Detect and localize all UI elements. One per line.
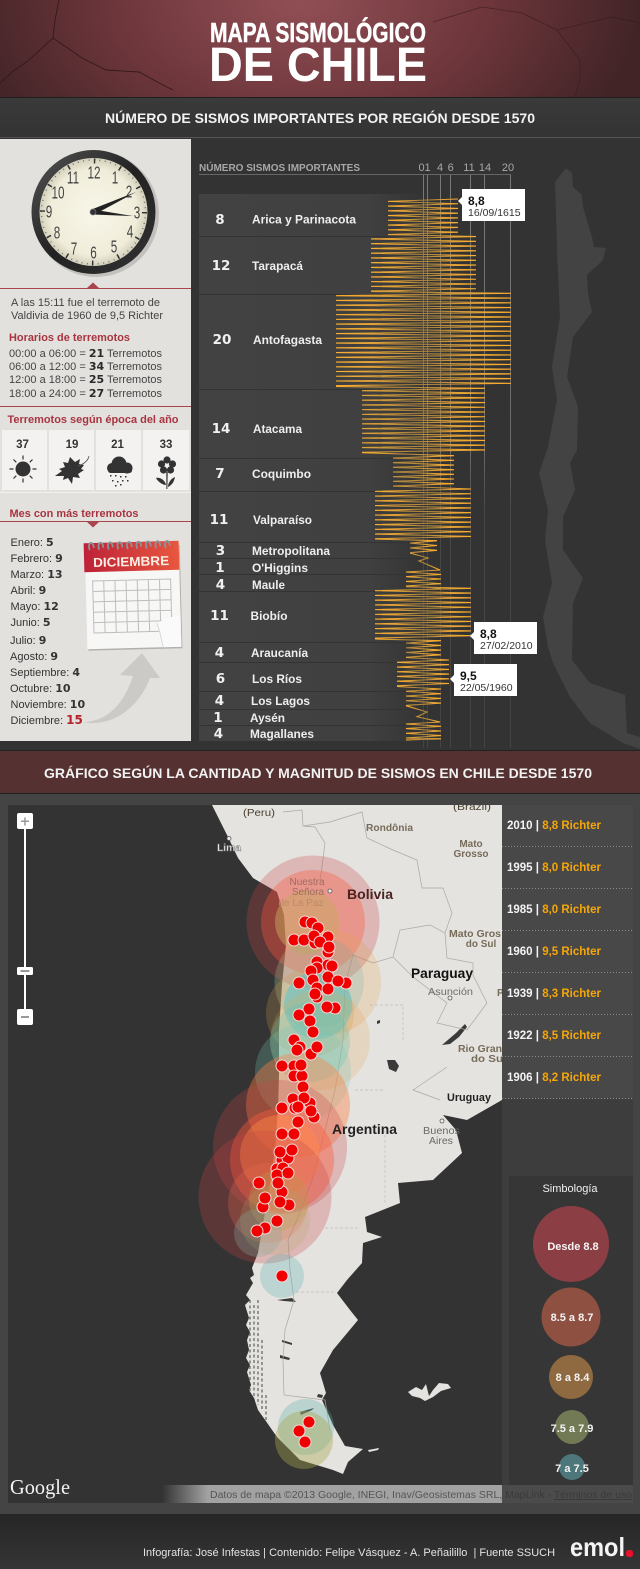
icon: flower [156, 456, 176, 489]
heading: época del año: Terremotos según época del año [8, 414, 179, 426]
map labels: Rio Gran [458, 1044, 502, 1055]
region labels: 4 [215, 645, 224, 661]
text: horarios de terremotos: 06:00 a 12:00 = 34 Terremotos [9, 360, 163, 373]
region labels: Antofagasta [253, 335, 323, 347]
legend: simbología: 8 a 8.4 [556, 1372, 590, 1384]
icon: clock: 3 [134, 203, 140, 223]
legend: simbología: 7.5 a 7.9 [551, 1423, 593, 1435]
map labels: Mato Gros [449, 929, 501, 940]
icon: leaf [55, 457, 84, 484]
region labels: Valparaíso [253, 515, 312, 527]
callout: 9,5 1960 [450, 664, 517, 696]
region labels: Maule [252, 580, 285, 592]
chart axis: 14 [479, 162, 491, 174]
region labels: 12 [212, 258, 230, 274]
icon: clock [32, 150, 159, 277]
list: months: Diciembre: 15 [10, 713, 83, 727]
land [212, 805, 502, 1474]
map labels: (Brazil) [453, 801, 491, 813]
sidebar: major quakes: 1995 | 8,0 Richter [507, 860, 601, 874]
sidebar: major quakes: 1939 | 8,3 Richter [507, 986, 601, 1000]
chart axis: 0 [418, 162, 425, 174]
sidebar: major quakes: 1985 | 8,0 Richter [507, 902, 601, 916]
region labels: 14 [212, 421, 230, 437]
map labels: Bolivia [347, 886, 393, 902]
map labels [217, 801, 504, 1147]
list: months: Febrero: 9 [10, 552, 63, 565]
map labels: Señora [292, 887, 325, 898]
zigzag seismograph chart [336, 199, 511, 740]
list: months [10, 536, 85, 727]
icon: clock: 6 [90, 243, 97, 263]
season cards: 19 [66, 439, 78, 451]
text: horarios de terremotos [9, 332, 163, 400]
icon: calendar: DICIEMBRE [93, 553, 170, 570]
earthquake points [251, 916, 352, 1448]
heading: mes con más terremotos: Mes con más terremotos [10, 508, 138, 520]
icon: clock: 7 [71, 239, 77, 259]
sidebar: major quakes: 1922 | 8,5 Richter [507, 1028, 601, 1042]
list: months: Septiembre: 4 [10, 666, 80, 679]
region labels: 6 [216, 671, 225, 687]
region labels: Tarapacá [252, 261, 304, 273]
region labels: 8 [215, 212, 225, 228]
sidebar: major quakes: 1960 | 9,5 Richter [507, 944, 601, 958]
icon: clock: 12 [87, 163, 101, 183]
sidebar: major quakes [502, 805, 633, 1485]
map labels: do Sul [466, 939, 496, 950]
icon: clock: 8 [54, 223, 60, 243]
map labels: Mato [459, 839, 483, 850]
region labels: Magallanes [250, 729, 314, 741]
chart axis: 1 [424, 162, 431, 174]
list: months: Abril: 9 [10, 584, 46, 597]
zoom control [17, 813, 33, 1025]
text: horarios de terremotos: 00:00 a 06:00 = 21 Terremotos [9, 347, 163, 360]
panel: left statistics [0, 139, 191, 741]
region labels [210, 212, 357, 742]
icon: sun [10, 456, 36, 482]
map silhouette of Chile [539, 168, 640, 749]
region labels: O'Higgins [252, 563, 308, 575]
callout: 8,8 2010: 27/02/2010 [480, 640, 533, 652]
text: horarios de terremotos: Horarios de terremotos [9, 332, 130, 344]
map labels: do Su [471, 1054, 503, 1065]
season cards: 37 [16, 439, 29, 451]
icon: calendar [84, 541, 182, 651]
text: horarios de terremotos: 12:00 a 18:00 = 25 Terremotos [9, 373, 163, 386]
footer: Infografía: José Infestas | Contenido: Felipe Vásquez - A. Peñailillo | Fuente SSUCH [143, 1547, 555, 1559]
section heading: sismos por región [0, 98, 640, 138]
map labels: (Peru) [243, 807, 275, 819]
map labels: Aires [429, 1135, 453, 1147]
map [8, 801, 504, 1503]
text: Valdivia note [11, 297, 163, 322]
list: months: Julio: 9 [10, 634, 46, 647]
icon: clock: 4 [127, 222, 133, 242]
emol logo: emol [570, 1532, 625, 1562]
google logo: Google [10, 1475, 70, 1499]
attribution bar: Datos de mapa ©2013 Google, INEGI, Inav/Geosistemas SRL, MapLink - Términos de uso [210, 1489, 632, 1501]
title [209, 17, 427, 92]
region labels: Araucanía [251, 648, 309, 660]
season cards [2, 430, 189, 490]
region labels: 4 [214, 726, 223, 742]
icon: clock: 9 [46, 202, 52, 222]
chart axis: 20 [502, 162, 514, 174]
region labels: Los Ríos [252, 674, 302, 686]
attribution bar [162, 1485, 633, 1503]
season cards: 21 [111, 439, 124, 451]
map labels: Lima [217, 842, 241, 854]
legend: simbología: Desde 8.8 [547, 1241, 599, 1253]
list: months: Noviembre: 10 [10, 698, 85, 711]
list: months: Octubre: 10 [10, 682, 71, 695]
list: months: Mayo: 12 [10, 600, 59, 613]
callout: 8,8 1615: 8,8 [468, 194, 485, 208]
small city markers [227, 836, 452, 1123]
region labels: 20 [213, 332, 231, 348]
list: months: Enero: 5 [10, 536, 54, 549]
icon: clock: 11 [67, 168, 79, 188]
region labels: 11 [210, 512, 228, 528]
sidebar: major quakes: 2010 | 8,8 Richter [507, 818, 601, 832]
legend: simbología: 7 a 7.5 [555, 1463, 589, 1475]
season cards: 33 [160, 439, 172, 451]
callout: 8,8 1615 [458, 189, 525, 221]
icon: cloud with snow [107, 456, 132, 486]
chart axis: NÚMERO SISMOS IMPORTANTES [199, 161, 360, 174]
region labels: 3 [216, 543, 225, 559]
islands and lakes [250, 1020, 467, 1452]
map labels: de La Paz [278, 898, 324, 909]
chart axis: 4 [437, 162, 443, 174]
section heading: gráfico [0, 750, 640, 794]
region labels: Arica y Parinacota [252, 214, 357, 226]
map labels: Nuestra [289, 877, 325, 888]
map labels: Paraguay [411, 965, 473, 981]
magnitude circles [198, 856, 381, 1469]
region labels: Atacama [253, 424, 303, 436]
map labels: Asunción [428, 986, 473, 998]
region labels: 4 [216, 577, 225, 593]
legend: simbología: 8.5 a 8.7 [551, 1312, 593, 1324]
section heading: gráfico: GRÁFICO SEGÚN LA CANTIDAD Y MAGNITUD DE SISMOS EN CHILE DESDE 1570 [44, 764, 592, 781]
region rows [199, 194, 439, 741]
map labels: Grosso [453, 849, 489, 860]
region labels: Los Lagos [251, 696, 310, 708]
region labels: 11 [210, 608, 229, 624]
map labels: Rondônia [366, 823, 413, 834]
icon: clock: 1 [112, 168, 118, 188]
text: horarios de terremotos: 18:00 a 24:00 = 27 Terremotos [9, 387, 163, 400]
callout: 8,8 1615: 16/09/1615 [468, 207, 521, 219]
list: months: Junio: 5 [10, 616, 51, 629]
callout: 8,8 2010 [470, 622, 537, 654]
region labels: Aysén [250, 713, 285, 725]
header banner [0, 0, 640, 98]
title: MAPA SISMOLÓGICO [210, 17, 426, 48]
region labels: 4 [215, 693, 224, 709]
chart axis [199, 161, 514, 748]
title: DE CHILE [209, 39, 427, 92]
region labels: 1 [215, 560, 225, 576]
section heading: sismos por región: NÚMERO DE SISMOS IMPORTANTES POR REGIÓN DESDE 1570 [105, 109, 535, 126]
text: Valdivia note: Valdivia de 1960 de 9,5 Richter [11, 310, 163, 322]
map labels: Uruguay [447, 1092, 492, 1104]
icon: clock: 10 [51, 183, 65, 203]
region labels: 7 [215, 466, 225, 482]
callout: 9,5 1960: 9,5 [460, 669, 477, 683]
region labels: Metropolitana [252, 546, 331, 558]
region labels: Coquimbo [252, 469, 311, 481]
icon: clock: 5 [111, 237, 117, 257]
callout: 9,5 1960: 22/05/1960 [460, 682, 513, 694]
arrow [82, 653, 160, 723]
map labels: Buenos [423, 1125, 460, 1137]
list: months: Agosto: 9 [10, 650, 58, 663]
legend: simbología [509, 1176, 633, 1485]
list: months: Marzo: 13 [10, 568, 62, 581]
icon: clock: 2 [126, 182, 132, 202]
chart axis: 11 [463, 162, 475, 174]
text: Valdivia note: A las 15:11 fue el terremoto de [11, 297, 160, 309]
region labels: Biobío [250, 611, 288, 623]
region labels: 1 [213, 710, 223, 726]
callout: 8,8 2010: 8,8 [480, 627, 497, 641]
legend: simbología: Simbología [542, 1183, 598, 1195]
sidebar: major quakes: 1906 | 8,2 Richter [507, 1070, 601, 1084]
chart axis: 6 [448, 162, 454, 174]
footer [0, 1514, 640, 1569]
map labels: P [497, 988, 504, 999]
map frame [0, 794, 640, 1514]
map labels: Argentina [332, 1121, 397, 1137]
borders [283, 810, 487, 1430]
